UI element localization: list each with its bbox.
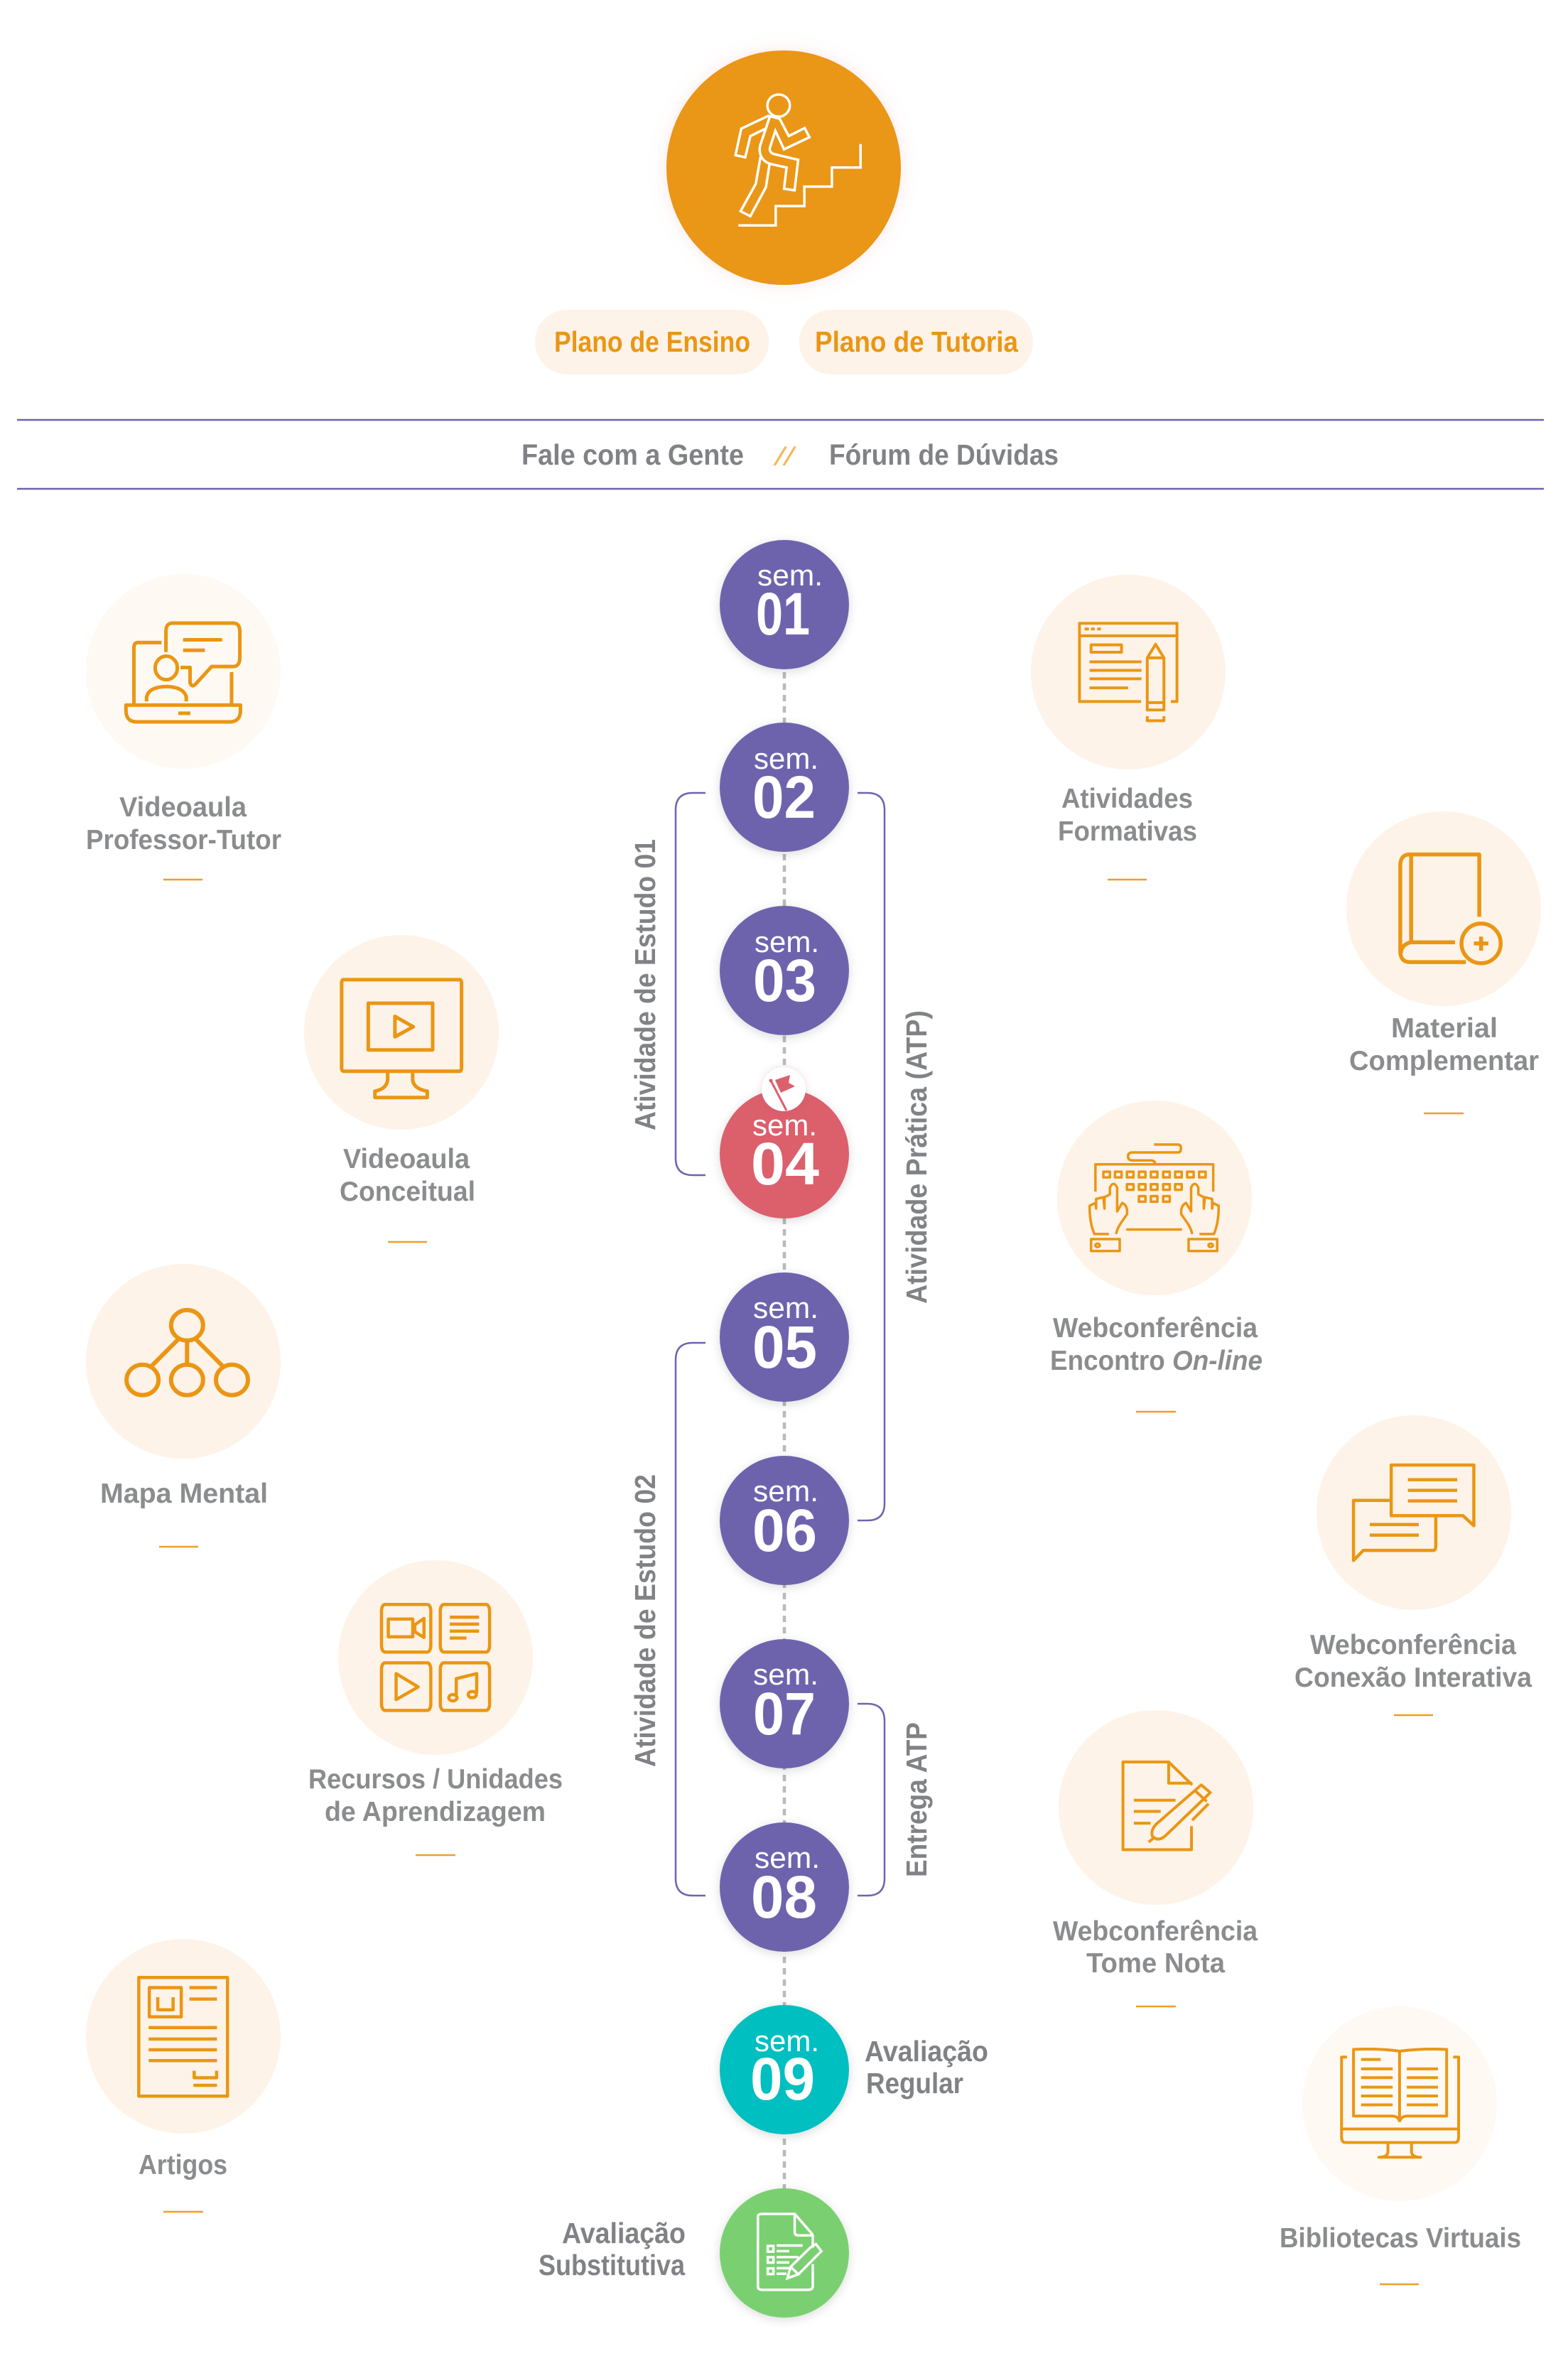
week 08: 08 (751, 1864, 817, 1930)
contact band: Fale com a Gente // Fórum de Dúvidas: Fale com a Gente (521, 438, 744, 471)
resource: Atividades Formativas: Atividades (1061, 784, 1193, 814)
icon: document with pencil (1123, 1762, 1211, 1849)
button: Plano de Tutoria (799, 310, 1033, 374)
contact band: Fale com a Gente // Fórum de Dúvidas: // (772, 442, 797, 471)
resource: Atividades Formativas: Formativas (1058, 816, 1197, 847)
week 07 (720, 1639, 849, 1768)
resource: Artigos (86, 1939, 281, 2212)
bracket: Atividade de Estudo 01: Atividade de Estudo 01 (629, 839, 661, 1130)
week 06: 06 (752, 1497, 817, 1564)
resource: Bibliotecas Virtuais: Bibliotecas Virtuais (1280, 2223, 1521, 2254)
resource: Webconferência Tome Nota: Tome Nota (1086, 1948, 1225, 1979)
resource: Recursos / Unidades de Aprendizagem: Recursos / Unidades (308, 1764, 563, 1795)
resource: Webconferência Tome Nota: Webconferência (1053, 1916, 1258, 1947)
resource: Mapa Mental (86, 1264, 281, 1547)
week 02 (720, 723, 849, 852)
icon: laptop with speech bubble (126, 623, 240, 722)
week 02: 02 (752, 764, 816, 831)
resource: Artigos: Artigos (139, 2150, 227, 2181)
week 05 (720, 1272, 849, 1402)
resource: Mapa Mental: Mapa Mental (100, 1479, 268, 1509)
resource: Bibliotecas Virtuais (1280, 2006, 1521, 2284)
icon: book with plus (1400, 855, 1501, 963)
timeline dashed connector (783, 604, 786, 2252)
week 03: sem. (755, 925, 819, 958)
week 05: 05 (752, 1314, 817, 1380)
icon: open book on monitor (1341, 2049, 1459, 2157)
resource: Material Complementar: Complementar (1349, 1046, 1539, 1076)
week 03 (720, 906, 849, 1035)
button: Plano de Tutoria: Plano de Tutoria (815, 325, 1019, 358)
contact band: Fale com a Gente // Fórum de Dúvidas (17, 420, 1544, 489)
resource: Material Complementar: Material (1391, 1013, 1498, 1044)
week 09: sem. (755, 2024, 819, 2058)
icon: monitor with play (342, 980, 462, 1098)
resource: Recursos / Unidades de Aprendizagem: de Aprendizagem (325, 1797, 546, 1827)
label: Avaliação Substitutiva (539, 2217, 686, 2281)
label: Avaliação Regular (865, 2035, 988, 2100)
resource: Atividades Formativas (1031, 575, 1226, 880)
week 01: 01 (756, 580, 810, 647)
label: Avaliação Substitutiva: Avaliação (562, 2217, 686, 2249)
icon: media tiles (382, 1604, 490, 1710)
icon: main orange circle with person climbing stairs (666, 50, 901, 285)
resource: Videoaula Professor-Tutor: Professor-Tutor (86, 825, 281, 855)
resource: Recursos / Unidades de Aprendizagem (308, 1560, 563, 1855)
week 03: 03 (753, 947, 816, 1014)
icon: two speech bubbles (1353, 1465, 1474, 1560)
resource: Videoaula Conceitual: Videoaula (343, 1144, 470, 1174)
bracket: Atividade Prática (ATP) (858, 793, 933, 1520)
week 09: 09 (750, 2046, 815, 2112)
bracket: Atividade de Estudo 01 (629, 793, 705, 1175)
contact band: Fale com a Gente // Fórum de Dúvidas: Fórum de Dúvidas (829, 438, 1059, 471)
resource: Videoaula Conceitual: Conceitual (340, 1177, 475, 1207)
bracket: Atividade de Estudo 02: Atividade de Estudo 02 (629, 1474, 661, 1767)
resource: Webconferência Conexão Interativa: Conexão Interativa (1294, 1663, 1532, 1693)
resource: Material Complementar (1346, 811, 1541, 1113)
bracket: Entrega ATP (858, 1704, 933, 1896)
button: Plano de Ensino (535, 310, 769, 374)
week 05: sem. (753, 1291, 818, 1324)
resource: Videoaula Professor-Tutor: Videoaula (119, 792, 247, 823)
icon: mind map (126, 1310, 248, 1395)
bracket: Atividade de Estudo 02 (629, 1343, 705, 1896)
icon: hands typing on keyboard (1090, 1145, 1218, 1251)
resource: Videoaula Professor-Tutor (86, 574, 281, 880)
week 01: sem. (757, 558, 823, 592)
icon: article page (139, 1977, 227, 2096)
label: Avaliação Regular: Avaliação (865, 2035, 988, 2068)
resource: Webconferência Conexão Interativa (1294, 1415, 1532, 1715)
week 01 (720, 540, 849, 669)
bracket: Atividade Prática (ATP): Atividade Prática (ATP) (900, 1010, 933, 1304)
week 04 (720, 1089, 849, 1218)
resource: Webconferência Conexão Interativa: Webconferência (1310, 1630, 1516, 1660)
icon: browser window and pencil (1079, 623, 1177, 720)
week 07: sem. (753, 1658, 818, 1691)
icon: flag badge on week 04 (762, 1067, 806, 1111)
label: Avaliação Regular: Regular (866, 2067, 963, 2100)
week 07: 07 (753, 1680, 816, 1747)
week 06: sem. (753, 1474, 818, 1508)
week 08: sem. (755, 1841, 820, 1874)
week 08 (720, 1822, 849, 1952)
button: Plano de Ensino: Plano de Ensino (554, 325, 750, 358)
resource: Webconferência Encontro On-line: Encontro On-line (1050, 1346, 1262, 1376)
resource: Webconferência Tome Nota (1053, 1710, 1258, 2006)
week 04: sem. (752, 1108, 817, 1142)
icon: substitute exam green circle (720, 2188, 849, 2318)
week 09 (720, 2005, 849, 2134)
resource: Webconferência Encontro On-line: Webconferência (1053, 1313, 1258, 1344)
resource: Videoaula Conceitual (304, 935, 499, 1242)
week 02: sem. (754, 742, 818, 775)
bracket: Entrega ATP: Entrega ATP (900, 1722, 933, 1877)
week 04: 04 (751, 1130, 819, 1197)
label: Avaliação Substitutiva: Substitutiva (539, 2249, 686, 2281)
week 06 (720, 1456, 849, 1585)
resource: Webconferência Encontro On-line (1050, 1101, 1262, 1412)
